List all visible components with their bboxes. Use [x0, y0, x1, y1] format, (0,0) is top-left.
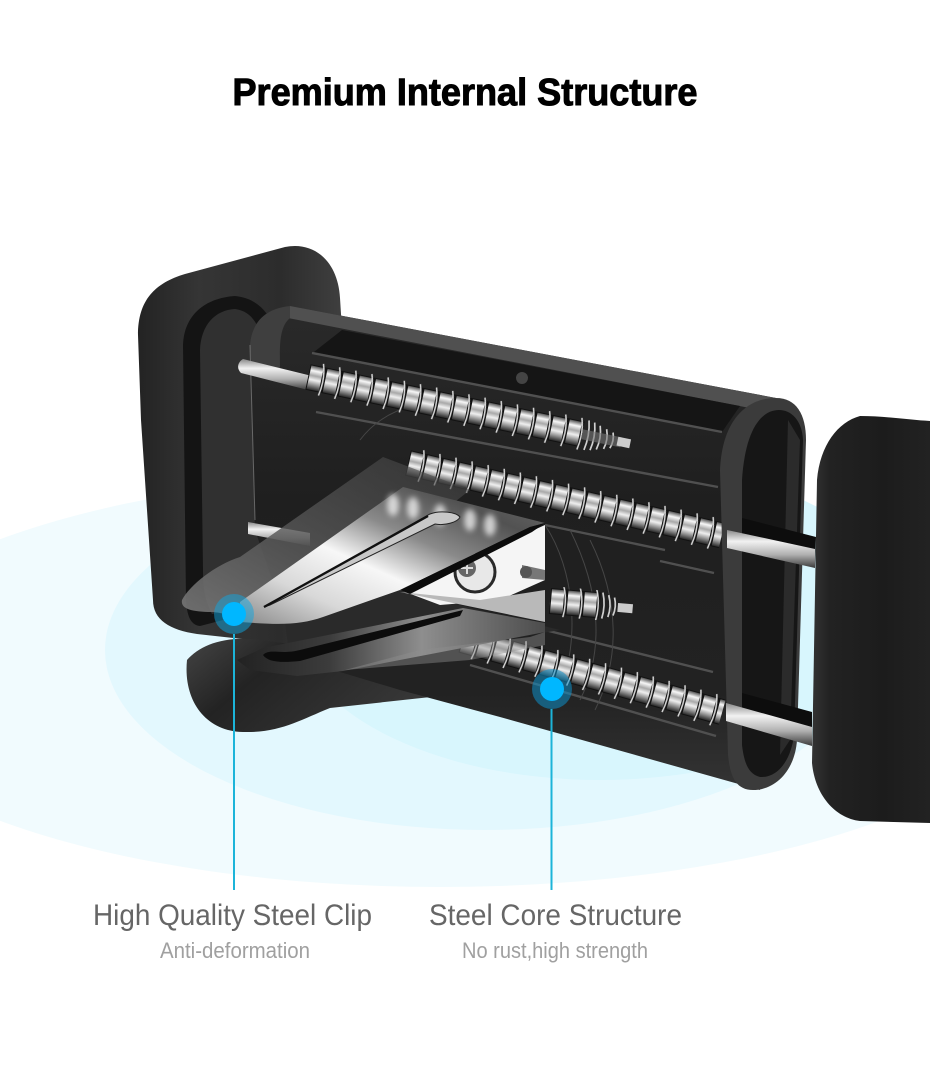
lower clip slot	[263, 610, 463, 662]
label: steel core structure: No rust,high strength	[462, 938, 648, 963]
steel clip	[182, 457, 560, 676]
spring holder body	[250, 306, 776, 790]
label: high quality steel clip	[93, 899, 372, 963]
right silver rods	[726, 518, 816, 746]
lower spring	[457, 624, 727, 729]
label: steel core structure	[429, 899, 682, 963]
marker: steel core	[532, 669, 572, 890]
label: high quality steel clip: High Quality Steel Clip	[93, 899, 372, 932]
lower steel plate	[237, 608, 545, 676]
white inner plate with screw	[400, 525, 545, 622]
marker: steel clip	[214, 594, 254, 890]
spring reflections on steel	[387, 494, 496, 536]
lower translucent blade	[345, 632, 545, 670]
black edge of plate	[400, 523, 545, 594]
lower jaw rubber pad	[187, 639, 470, 732]
background glow ellipses	[0, 460, 930, 887]
middle spring	[404, 446, 726, 552]
upper steel plate	[240, 487, 545, 624]
upper clip slot	[264, 512, 460, 607]
title: Premium Internal Structure	[232, 72, 698, 114]
label: steel core structure: Steel Core Structure	[429, 899, 682, 932]
upper translucent jaw	[182, 457, 470, 622]
short spring	[549, 586, 634, 623]
end cap of holder	[720, 398, 806, 790]
shadow block between the jaws	[285, 590, 560, 660]
right rubber grip pad	[812, 416, 930, 823]
label: high quality steel clip: Anti-deformation	[160, 938, 310, 963]
left rubber grip pad	[138, 246, 342, 650]
upper spring	[305, 360, 634, 461]
silver rods on the left	[238, 359, 312, 546]
